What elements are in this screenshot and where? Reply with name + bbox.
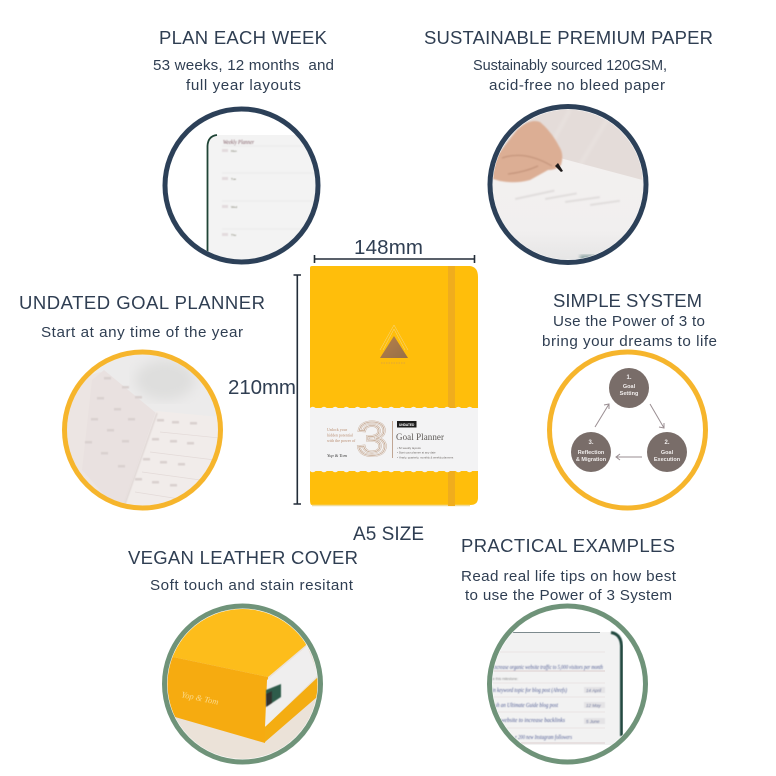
arrow: step 1 to 2 xyxy=(650,404,664,428)
text: examples description: to use the Power of 3 System xyxy=(465,587,672,604)
logo: numeral 3: 3 xyxy=(357,412,387,465)
heading: sustainable premium paper: SUSTAINABLE PREMIUM PAPER xyxy=(424,27,713,48)
text: examples description: Read real life tips on how best xyxy=(461,568,677,585)
photo: handwritten example page: r 200 new Instagram followers xyxy=(515,734,573,741)
text: goal planner title: Goal Planner xyxy=(396,432,444,442)
panel: vegan leather cover xyxy=(128,547,358,768)
photo: handwritten example page: 14 April xyxy=(586,688,602,693)
text: band bullets xyxy=(397,446,454,460)
heading: practical examples: PRACTICAL EXAMPLES xyxy=(461,535,675,556)
text: examples description xyxy=(461,568,677,604)
step 3: reflection and migration: 3. xyxy=(588,440,594,446)
text: weekly layouts description: 53 weeks, 12 months and xyxy=(153,57,334,74)
text: paper description xyxy=(473,58,667,94)
photo: weekly planner page: Wed xyxy=(231,205,237,209)
illustration: yellow goal planner xyxy=(310,266,478,506)
text: band bullets: • Yearly, quarterly, monthly & weekly planners xyxy=(397,456,454,460)
panel: undated goal planner xyxy=(19,292,265,515)
text: cover description: Soft touch and stain resitant xyxy=(150,577,354,594)
photo: weekly planner page xyxy=(160,105,322,267)
step 1: goal setting: Goal xyxy=(623,384,636,390)
photo: weekly planner page: Mon xyxy=(231,149,237,153)
text: band tagline: with the power of xyxy=(327,438,356,443)
arrow: width dimension line xyxy=(314,255,474,263)
badge: undated xyxy=(397,421,416,428)
step 1: goal setting: 1. xyxy=(626,375,632,381)
photo: yellow cover close-up xyxy=(160,600,326,768)
ring xyxy=(164,606,320,762)
logo: numeral 3: 3 xyxy=(357,412,387,465)
ring xyxy=(490,606,646,762)
photo: handwritten example page: 12 May xyxy=(586,703,602,708)
label: height 210mm: 210mm xyxy=(228,376,296,399)
text: weekly layouts description xyxy=(153,57,334,94)
text: simple system description: bring your dreams to life xyxy=(542,333,717,350)
ring xyxy=(550,352,706,508)
text: band tagline xyxy=(327,427,356,443)
text: band bullets: • Start your planner at any date xyxy=(397,450,436,454)
badge: undated: UNDATED xyxy=(399,423,415,427)
paper band xyxy=(310,407,478,472)
arrow: step 2 to 3 xyxy=(616,454,642,460)
photo: hand writing on paper xyxy=(485,100,651,270)
step 3: reflection and migration: & Migration xyxy=(576,457,607,463)
ring xyxy=(490,106,646,262)
signature: Yop & Tom xyxy=(327,453,348,458)
step 1: goal setting xyxy=(609,368,649,408)
photo: handwritten example page: increase organic website traffic to 5,000 visitors per month xyxy=(493,664,603,671)
photo: handwritten example page: sh an Ultimate Guide blog post xyxy=(495,703,558,709)
label: A5 size: A5 SIZE xyxy=(353,524,424,545)
arrow: height dimension line xyxy=(294,275,301,504)
elastic strap xyxy=(448,266,455,506)
text: band tagline: hidden potential xyxy=(327,432,354,438)
photo: weekly planner page: Tue xyxy=(231,177,236,181)
photo: handwritten example page: se this milestone: xyxy=(491,677,518,681)
text: paper description: acid-free no bleed paper xyxy=(489,77,665,94)
heading: simple system: SIMPLE SYSTEM xyxy=(553,290,702,311)
text: simple system description: Use the Power of 3 to xyxy=(553,313,705,330)
panel: plan each week xyxy=(153,27,334,267)
text: simple system description xyxy=(542,313,717,350)
photo: weekly planner page: Thu xyxy=(231,233,237,237)
photo: yellow cover close-up: Yop & Tom xyxy=(181,689,219,707)
text: band tagline: Unlock your xyxy=(327,427,348,432)
ring xyxy=(165,109,318,262)
step 1: goal setting: Setting xyxy=(620,391,638,397)
heading: plan each week: PLAN EACH WEEK xyxy=(159,27,328,48)
photo: open planner pages xyxy=(60,347,230,515)
step 2: goal execution: Goal xyxy=(661,450,674,456)
photo: handwritten example page: 5 June xyxy=(586,719,600,724)
logo: numeral 3: 3 xyxy=(357,412,387,465)
panel: practical examples xyxy=(461,535,677,768)
photo: handwritten example page: e website to increase backlinks xyxy=(497,718,566,724)
step 3: reflection and migration: Reflection xyxy=(578,450,605,456)
photo: handwritten example page xyxy=(485,600,651,768)
heading: undated goal planner: UNDATED GOAL PLANNER xyxy=(19,292,265,313)
icon: copper triangle xyxy=(380,325,408,363)
text: undated description: Start at any time of the year xyxy=(41,324,243,341)
photo: handwritten example page: in keyword topic for blog post (Ahrefs) xyxy=(492,687,567,694)
arrow: step 3 to 1 xyxy=(595,404,609,427)
panel: simple system xyxy=(542,290,717,508)
text: band bullets: • 52 weekly layouts xyxy=(397,446,421,450)
heading: vegan leather cover: VEGAN LEATHER COVER xyxy=(128,547,358,568)
label: width 148mm: 148mm xyxy=(354,236,423,259)
step 3: reflection and migration xyxy=(571,432,611,472)
text: weekly layouts description: full year layouts xyxy=(186,77,301,94)
diagram: three step cycle xyxy=(550,352,706,508)
text: paper description: Sustainably sourced 120GSM, xyxy=(473,58,667,74)
step 2: goal execution: Execution xyxy=(654,457,681,463)
cover xyxy=(310,266,478,505)
panel: sustainable premium paper xyxy=(424,27,713,270)
panel: planner dimensions xyxy=(228,236,478,545)
step 2: goal execution: 2. xyxy=(664,440,670,446)
ring xyxy=(64,352,220,508)
step 2: goal execution xyxy=(647,432,687,472)
photo: weekly planner page: Weekly Planner xyxy=(223,140,255,146)
